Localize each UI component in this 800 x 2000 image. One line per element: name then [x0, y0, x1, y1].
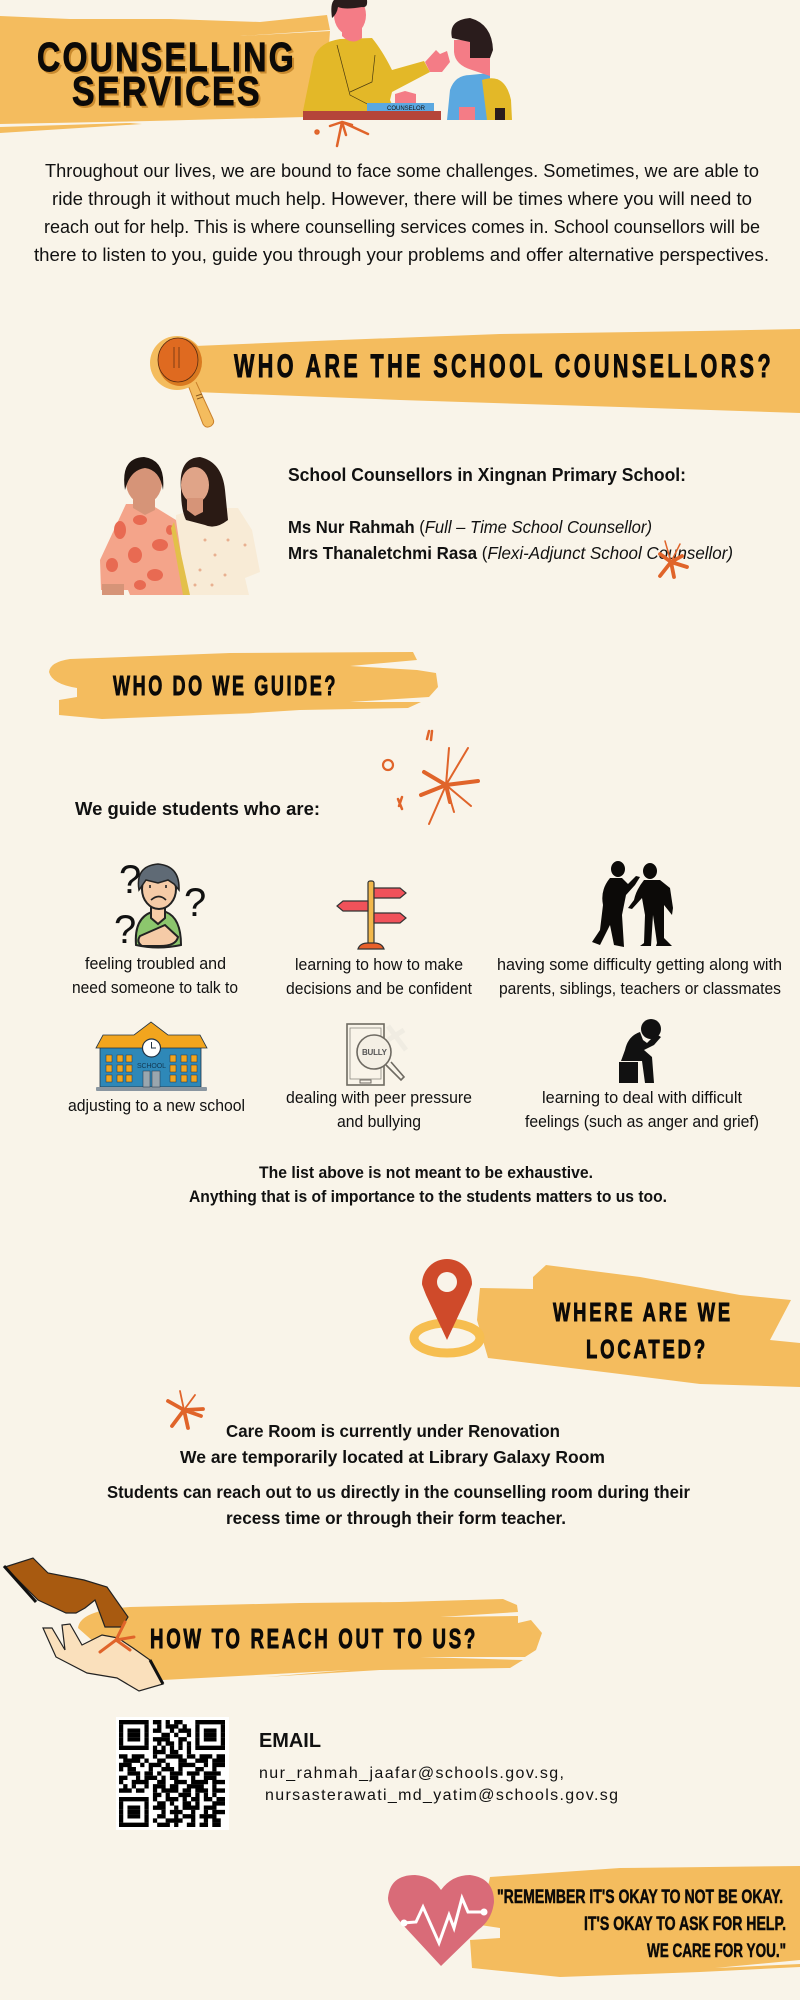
label: parents, siblings, teachers or classmates [499, 980, 781, 998]
label: dealing with peer pressure [286, 1089, 472, 1107]
header banner brush [0, 15, 330, 133]
label [497, 956, 782, 998]
intro paragraph: there to listen to you, guide you through your problems and offer alternative perspectives. [34, 244, 769, 265]
icon: two people arguing [592, 861, 673, 947]
spark under header [316, 122, 368, 146]
icon: bully magnifier on phone: BULLY [362, 1048, 388, 1057]
icon: person in thought [619, 1019, 661, 1083]
title [37, 34, 296, 114]
icon: confused student [114, 858, 206, 952]
item: peer pressure [286, 1024, 472, 1131]
item: new school [68, 1022, 245, 1115]
location text: Students can reach out to us directly in the counselling room during their [107, 1482, 690, 1502]
illustration: counsellor and student [303, 0, 512, 120]
counsellor names [288, 465, 733, 563]
email contact: nur_rahmah_jaafar@schools.gov.sg, [259, 1765, 564, 1782]
email contact: nursasterawati_md_yatim@schools.gov.sg [265, 1787, 618, 1804]
label: feelings (such as anger and grief) [525, 1113, 759, 1131]
counsellor names: Ms Nur Rahmah (Full – Time School Counsellor) [288, 517, 652, 537]
label: adjusting to a new school [68, 1097, 245, 1115]
location text: recess time or through their form teacher. [226, 1508, 566, 1528]
label [286, 956, 472, 998]
location text: Care Room is currently under Renovation [226, 1421, 560, 1441]
icon: signpost [337, 881, 406, 949]
icon: magnifying glass [150, 336, 214, 427]
intro paragraph: ride through it without much help. However, there will be times where you will need to [52, 188, 752, 209]
label [286, 1089, 472, 1131]
icon: heart with pulse [388, 1875, 494, 1966]
section banner: where are we located [477, 1265, 800, 1387]
spark on names [660, 541, 687, 577]
lead-in text: We guide students who are: [75, 798, 320, 819]
label: decisions and be confident [286, 980, 472, 998]
intro paragraph: reach out for help. This is where counselling services comes in. School counsellors will be [44, 216, 760, 237]
location text [107, 1421, 690, 1528]
illustration: counsellor and student: COUNSELOR [387, 106, 426, 112]
icon: hands [4, 1558, 163, 1691]
section banner: who are the school counsellors [195, 329, 800, 413]
note: list not exhaustive: Anything that is of importance to the students matters to us too. [189, 1188, 667, 1206]
icon: bully magnifier on phone [347, 1024, 406, 1085]
label [525, 1089, 759, 1131]
heading: where are we located: LOCATED? [586, 1334, 708, 1364]
intro paragraph [34, 160, 769, 265]
sparks [383, 731, 478, 824]
label: learning to how to make [295, 956, 463, 974]
heading: how to reach out to us: HOW TO REACH OUT TO US? [150, 1623, 478, 1654]
title: COUNSELLING [37, 34, 296, 80]
item: decisions [286, 881, 472, 998]
label: need someone to talk to [72, 979, 238, 997]
label [72, 955, 238, 997]
label: and bullying [337, 1113, 421, 1131]
QR code [116, 1717, 229, 1830]
label: feeling troubled and [85, 955, 226, 973]
photo: two counsellors [100, 457, 260, 595]
section banner: closing quote [470, 1866, 800, 1977]
note: list not exhaustive [189, 1164, 667, 1206]
counsellor names: School Counsellors in Xingnan Primary School: [288, 465, 686, 485]
title: SERVICES [72, 68, 262, 114]
heading: where are we located [553, 1297, 733, 1364]
icon: school building: SCHOOL [137, 1063, 166, 1070]
item: getting along [497, 861, 782, 998]
label: having some difficulty getting along with [497, 956, 782, 974]
note: list not exhaustive: The list above is not meant to be exhaustive. [259, 1164, 593, 1182]
location text: We are temporarily located at Library Galaxy Room [180, 1447, 605, 1467]
closing quote text [497, 1887, 786, 1962]
icon: confused student: ? [114, 908, 136, 952]
heading: who do we guide: WHO DO WE GUIDE? [113, 670, 338, 701]
label: learning to deal with difficult [542, 1089, 742, 1107]
icon: confused student: ? [119, 858, 141, 902]
item: troubled [72, 858, 238, 997]
icon: confused student: ? [184, 881, 206, 925]
email contact [259, 1730, 618, 1804]
icon: map pin [414, 1259, 480, 1353]
icon: school building [96, 1022, 207, 1091]
email contact: EMAIL [259, 1730, 321, 1752]
intro paragraph: Throughout our lives, we are bound to face some challenges. Sometimes, we are able to [45, 160, 759, 181]
spark [168, 1391, 203, 1428]
counsellor names: Mrs Thanaletchmi Rasa (Flexi-Adjunct School Counsellor) [288, 543, 733, 563]
item: difficult feelings [525, 1019, 759, 1131]
section banner: who do we guide [49, 652, 438, 719]
section banner: how to reach out [78, 1599, 542, 1680]
